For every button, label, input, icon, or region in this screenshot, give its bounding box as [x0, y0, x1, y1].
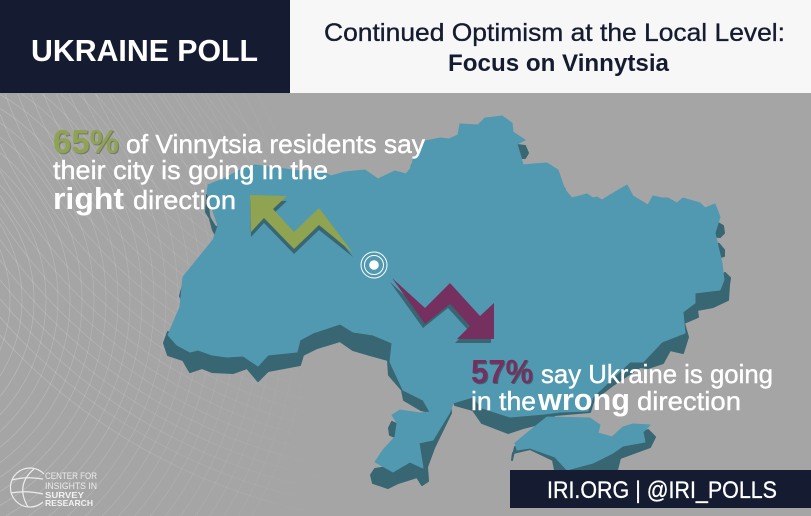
arrow: green, up-left [250, 195, 353, 257]
logo: Center for Insights in Survey Research [10, 468, 97, 508]
map shadow [164, 145, 730, 488]
header: title [290, 0, 811, 93]
footer: website and handle [510, 470, 811, 508]
mainland [168, 116, 724, 472]
text: wrong direction stat [471, 353, 773, 417]
footer: website and handle: IRI.ORG | @IRI_POLLS [547, 477, 777, 504]
text: wrong direction stat: say Ukraine is going [541, 359, 773, 389]
arrow: purple, down-right [390, 278, 494, 343]
text: wrong direction stat: 57% [471, 353, 533, 390]
text: wrong direction stat: 57% [472, 354, 534, 391]
text: right direction stat: right [53, 181, 124, 216]
text: right direction stat [53, 123, 425, 216]
text: wrong direction stat: direction [637, 386, 741, 416]
logo: Center for Insights in Survey Research: RESEARCH [45, 498, 93, 508]
logo: Center for Insights in Survey Research: SURVEY [45, 490, 84, 500]
icon: Vinnytsia location target [361, 252, 387, 278]
logo: Center for Insights in Survey Research: CENTER FOR [45, 471, 97, 482]
text: right direction stat: of Vinnytsia residents say [126, 129, 425, 159]
text: right direction stat: 65% [54, 124, 120, 161]
icon: globe [10, 468, 44, 507]
header: title: Focus on Vinnytsia [448, 50, 670, 77]
crimea [515, 417, 650, 470]
map of Ukraine [164, 116, 730, 488]
text: right direction stat: 65% [53, 123, 119, 160]
header: ukraine poll [0, 0, 290, 93]
header: title: Continued Optimism at the Local Level: [324, 19, 785, 47]
logo: Center for Insights in Survey Research: INSIGHTS IN [45, 481, 97, 492]
text: wrong direction stat: in the [471, 386, 536, 416]
text: right direction stat: direction [133, 185, 236, 215]
header: ukraine poll: UKRAINE POLL [31, 33, 258, 68]
text: wrong direction stat: wrong [537, 382, 630, 417]
text: right direction stat: their city is going in the [53, 155, 328, 185]
